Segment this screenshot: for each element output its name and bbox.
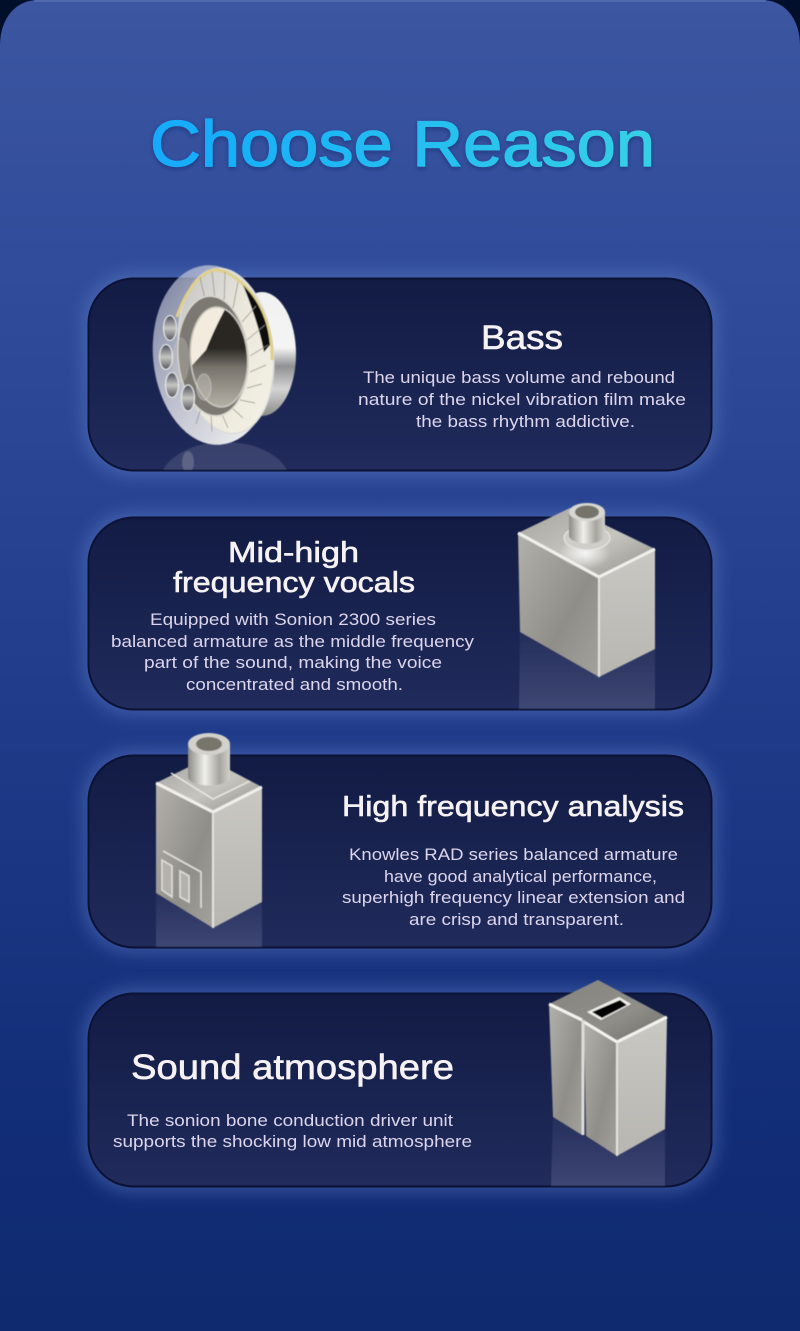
text: sound atmosphere description — [113, 1111, 472, 1151]
text: bass description: The unique bass volume and rebound — [363, 368, 675, 387]
text: high frequency description: superhigh frequency linear extension and — [342, 888, 685, 907]
heading: bass: Bass — [481, 319, 563, 357]
panel: mid-high frequency vocals — [82, 503, 718, 716]
text: mid-high description: balanced armature as the middle frequency — [111, 632, 475, 651]
panel background: sound atmosphere — [82, 987, 718, 1193]
panel: high frequency analysis — [82, 733, 718, 954]
heading: mid-high frequency vocals — [173, 537, 415, 599]
icon: balanced armature driver — [518, 503, 655, 709]
text: mid-high description: concentrated and smooth. — [186, 675, 403, 694]
logo mark on driver — [162, 851, 201, 908]
text: high frequency description: have good analytical performance, — [384, 867, 657, 886]
text: mid-high description: part of the sound, making the voice — [144, 653, 442, 672]
panel: bass — [78, 264, 722, 480]
text: sound atmosphere description: The sonion bone conduction driver unit — [127, 1111, 453, 1130]
text: bass description: the bass rhythm addictive. — [416, 412, 635, 431]
heading: mid-high frequency vocals: Mid-high — [228, 537, 359, 569]
text: high frequency description: Knowles RAD series balanced armature — [349, 845, 678, 864]
icon: bone conduction driver — [549, 980, 667, 1186]
panel: sound atmosphere — [82, 980, 718, 1193]
text: mid-high description: Equipped with Sonion 2300 series — [150, 610, 436, 629]
text: high frequency description — [342, 845, 685, 929]
heading: high frequency analysis: High frequency analysis — [342, 791, 684, 823]
dome cone — [190, 307, 247, 406]
panel background: mid-high — [82, 511, 718, 716]
title: Choose Reason — [150, 107, 655, 180]
icon: dynamic driver — [152, 264, 297, 470]
heading: sound atmosphere: Sound atmosphere — [131, 1048, 454, 1087]
text: bass description — [358, 368, 686, 431]
text: sound atmosphere description: supports the shocking low mid atmosphere — [113, 1132, 472, 1151]
text: bass description: nature of the nickel vibration film make — [358, 390, 686, 409]
text: mid-high description — [111, 610, 475, 694]
text: high frequency description: are crisp and transparent. — [409, 910, 624, 929]
heading: mid-high frequency vocals: frequency vocals — [173, 567, 415, 599]
panel background: high frequency — [82, 749, 718, 954]
icon: armature driver with logo — [156, 733, 262, 947]
panel background: bass — [82, 272, 718, 477]
